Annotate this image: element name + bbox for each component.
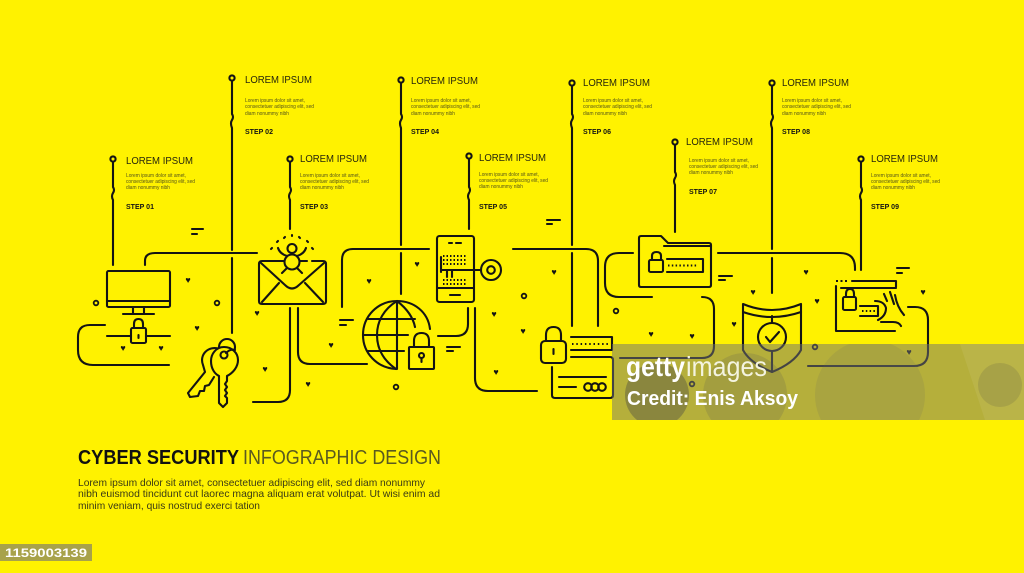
step 8: STEP 08 (782, 129, 810, 136)
icon: globe with lock (363, 301, 434, 369)
step 1: Lorem ipsum dolor sit amet, (126, 173, 186, 179)
step 5: Lorem ipsum dolor sit amet, (479, 172, 539, 178)
icon: browser with hand (836, 281, 904, 331)
step 1 (110, 155, 195, 265)
step 6: LOREM IPSUM (583, 77, 650, 89)
step 3 (287, 153, 369, 229)
step 5: LOREM IPSUM (479, 152, 546, 164)
step 8: Lorem ipsum dolor sit amet, (782, 98, 842, 104)
icon: credit card with lock (541, 327, 613, 398)
step 5 (466, 152, 548, 229)
icon: phone with key (437, 236, 501, 302)
decorative heart dots: ♥ (920, 287, 926, 297)
decorative heart dots: ♥ (491, 309, 497, 319)
step 2: Lorem ipsum dolor sit amet, (245, 98, 305, 104)
step 4: consectetuer adipiscing elit, sed (411, 104, 480, 110)
decorative heart dots: ♥ (814, 296, 820, 306)
image id tag (0, 544, 92, 561)
step 4: STEP 04 (411, 129, 439, 136)
step 3: LOREM IPSUM (300, 153, 367, 165)
step 3: diam nonummy nibh (300, 185, 344, 191)
step 4: LOREM IPSUM (411, 75, 478, 87)
description text: nibh euismod tincidunt cut laorec magna aliquam erat volutpat. Ut wisi enim ad (78, 488, 440, 500)
decorative heart dots: ♥ (551, 267, 557, 277)
decorative heart dots: ♥ (158, 343, 164, 353)
step 4: diam nonummy nibh (411, 111, 455, 117)
step 9: diam nonummy nibh (871, 185, 915, 191)
watermark band: images (686, 351, 767, 382)
decorative heart dots: ♥ (254, 308, 260, 318)
decorative heart dots (120, 259, 926, 389)
step 1: STEP 01 (126, 204, 154, 211)
decorative heart dots: ♥ (648, 329, 654, 339)
decorative heart dots: ♥ (906, 347, 912, 357)
title (78, 447, 441, 469)
step 4: Lorem ipsum dolor sit amet, (411, 98, 471, 104)
image id tag: 1159003139 (5, 546, 87, 560)
step 8: diam nonummy nibh (782, 111, 826, 117)
icon: keys (188, 339, 238, 407)
step 2: diam nonummy nibh (245, 111, 289, 117)
connector lines (78, 249, 928, 402)
step 5: consectetuer adipiscing elit, sed (479, 178, 548, 184)
step 1: LOREM IPSUM (126, 155, 193, 167)
title: CYBER SECURITY (78, 447, 240, 469)
step 2: LOREM IPSUM (245, 74, 312, 86)
step 6: consectetuer adipiscing elit, sed (583, 104, 652, 110)
decorative heart dots: ♥ (803, 267, 809, 277)
decorative heart dots: ♥ (194, 323, 200, 333)
small dash marks (192, 220, 909, 351)
icon: monitor with lock (107, 271, 170, 343)
step 6: diam nonummy nibh (583, 111, 627, 117)
decorative heart dots: ♥ (366, 276, 372, 286)
step 7: LOREM IPSUM (686, 136, 753, 148)
step 9 (858, 153, 940, 270)
step 4 (398, 75, 480, 245)
watermark band (612, 344, 1024, 420)
step 9: LOREM IPSUM (871, 153, 938, 165)
step 1: diam nonummy nibh (126, 185, 170, 191)
step 7: consectetuer adipiscing elit, sed (689, 164, 758, 170)
icon: folder with password (639, 236, 711, 287)
step 2: consectetuer adipiscing elit, sed (245, 104, 314, 110)
step 6: Lorem ipsum dolor sit amet, (583, 98, 643, 104)
step 8: consectetuer adipiscing elit, sed (782, 104, 851, 110)
step 5: STEP 05 (479, 204, 507, 211)
step 3: Lorem ipsum dolor sit amet, (300, 173, 360, 179)
decorative heart dots: ♥ (520, 326, 526, 336)
step 2 (229, 74, 314, 250)
title: INFOGRAPHIC DESIGN (243, 447, 441, 469)
decorative ring dots (94, 294, 817, 389)
step 7: STEP 07 (689, 189, 717, 196)
step 5: diam nonummy nibh (479, 184, 523, 190)
step 3: consectetuer adipiscing elit, sed (300, 179, 369, 185)
decorative heart dots: ♥ (305, 379, 311, 389)
watermark band: getty (626, 351, 685, 382)
step 8 (769, 77, 851, 249)
watermark band: Credit: Enis Aksoy (627, 388, 799, 410)
step 9: Lorem ipsum dolor sit amet, (871, 173, 931, 179)
step 8: LOREM IPSUM (782, 77, 849, 89)
step 7 (672, 136, 758, 232)
decorative heart dots: ♥ (120, 343, 126, 353)
decorative heart dots: ♥ (414, 259, 420, 269)
icon: envelope with bug (259, 235, 326, 304)
decorative heart dots: ♥ (750, 287, 756, 297)
decorative heart dots: ♥ (689, 331, 695, 341)
step 3: STEP 03 (300, 204, 328, 211)
step 1: consectetuer adipiscing elit, sed (126, 179, 195, 185)
step 9: consectetuer adipiscing elit, sed (871, 179, 940, 185)
description text (78, 477, 440, 512)
step 7: Lorem ipsum dolor sit amet, (689, 158, 749, 164)
step 2: STEP 02 (245, 129, 273, 136)
decorative heart dots: ♥ (731, 319, 737, 329)
step 6: STEP 06 (583, 129, 611, 136)
step 9: STEP 09 (871, 204, 899, 211)
step 7: diam nonummy nibh (689, 170, 733, 176)
step 6 (569, 77, 652, 245)
decorative heart dots: ♥ (493, 367, 499, 377)
description text: minim veniam, quis nostrud exerci tation (78, 500, 260, 512)
decorative heart dots: ♥ (262, 364, 268, 374)
decorative heart dots: ♥ (185, 275, 191, 285)
icon: shield with check (743, 304, 801, 372)
decorative heart dots: ♥ (328, 340, 334, 350)
description text: Lorem ipsum dolor sit amet, consectetuer adipiscing elit, sed diam nonummy (78, 477, 426, 489)
